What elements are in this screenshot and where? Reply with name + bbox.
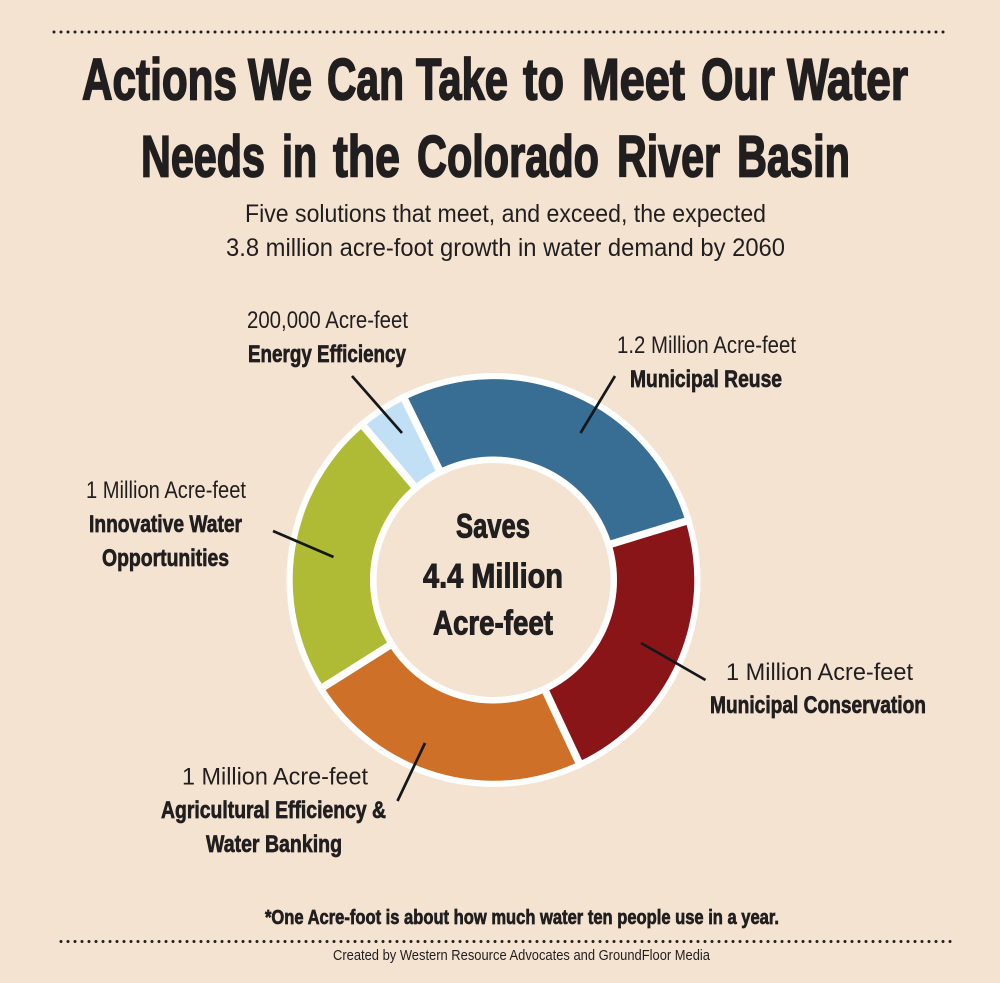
subtitle: 3.8 million acre-foot growth in water demand by 2060	[226, 234, 785, 262]
title: River	[617, 124, 720, 190]
center total: 4.4 Million	[423, 558, 563, 596]
donut chart	[286, 373, 700, 787]
title: Needs	[141, 124, 265, 190]
footnote: *One Acre-foot is about how much water ten people use in a year.	[265, 907, 779, 929]
title: Meet	[582, 48, 685, 112]
title: We	[248, 48, 312, 112]
leader line: agricultural efficiency	[398, 743, 425, 801]
label: municipal conservation: Municipal Conservation	[710, 692, 926, 719]
title: the	[333, 124, 400, 190]
title: Can	[327, 48, 404, 112]
leader line: innovative water	[273, 531, 334, 557]
segment: agricultural efficiency	[324, 580, 579, 781]
label: energy efficiency: 200,000 Acre-feet	[247, 307, 408, 334]
label: energy efficiency: Energy Efficiency	[248, 341, 407, 368]
segment: energy efficiency	[364, 400, 494, 580]
label: innovative water opportunities: 1 Million Acre-feet	[86, 477, 246, 504]
title: Water	[787, 48, 908, 112]
credit: Created by Western Resource Advocates and GroundFloor Media	[333, 947, 711, 964]
segment: municipal conservation	[494, 521, 694, 762]
label: agricultural efficiency and water banking: Agricultural Efficiency &	[161, 797, 386, 824]
label: innovative water opportunities	[86, 477, 246, 572]
segment: municipal reuse	[405, 379, 686, 580]
label: innovative water opportunities: Innovative Water	[89, 511, 242, 538]
label: municipal conservation	[710, 659, 926, 719]
title	[82, 48, 908, 190]
label: municipal reuse	[617, 332, 796, 393]
title: Take	[416, 48, 508, 112]
title: to	[523, 48, 564, 112]
label: municipal conservation: 1 Million Acre-feet	[726, 659, 913, 686]
label: energy efficiency	[247, 307, 408, 368]
center total	[423, 508, 563, 642]
center total: Saves	[456, 508, 530, 546]
center total: Acre-feet	[433, 604, 553, 642]
leader line: municipal conservation	[641, 643, 706, 680]
title: Our	[701, 48, 775, 112]
label: municipal reuse: Municipal Reuse	[630, 366, 782, 393]
segment: innovative water opportunities	[293, 427, 494, 687]
subtitle	[226, 200, 785, 262]
title: in	[282, 124, 317, 190]
label: agricultural efficiency and water banking: 1 Million Acre-feet	[182, 764, 368, 790]
title: Actions	[82, 48, 237, 112]
title: Basin	[737, 124, 850, 190]
leader line: municipal reuse	[580, 376, 615, 433]
label: agricultural efficiency and water banking	[161, 764, 386, 858]
title: Colorado	[417, 124, 599, 190]
label: innovative water opportunities: Opportunities	[102, 545, 229, 572]
label: agricultural efficiency and water banking: Water Banking	[206, 831, 342, 858]
leader line: energy efficiency	[352, 376, 402, 433]
label: municipal reuse: 1.2 Million Acre-feet	[617, 332, 796, 359]
subtitle: Five solutions that meet, and exceed, the expected	[245, 200, 766, 228]
